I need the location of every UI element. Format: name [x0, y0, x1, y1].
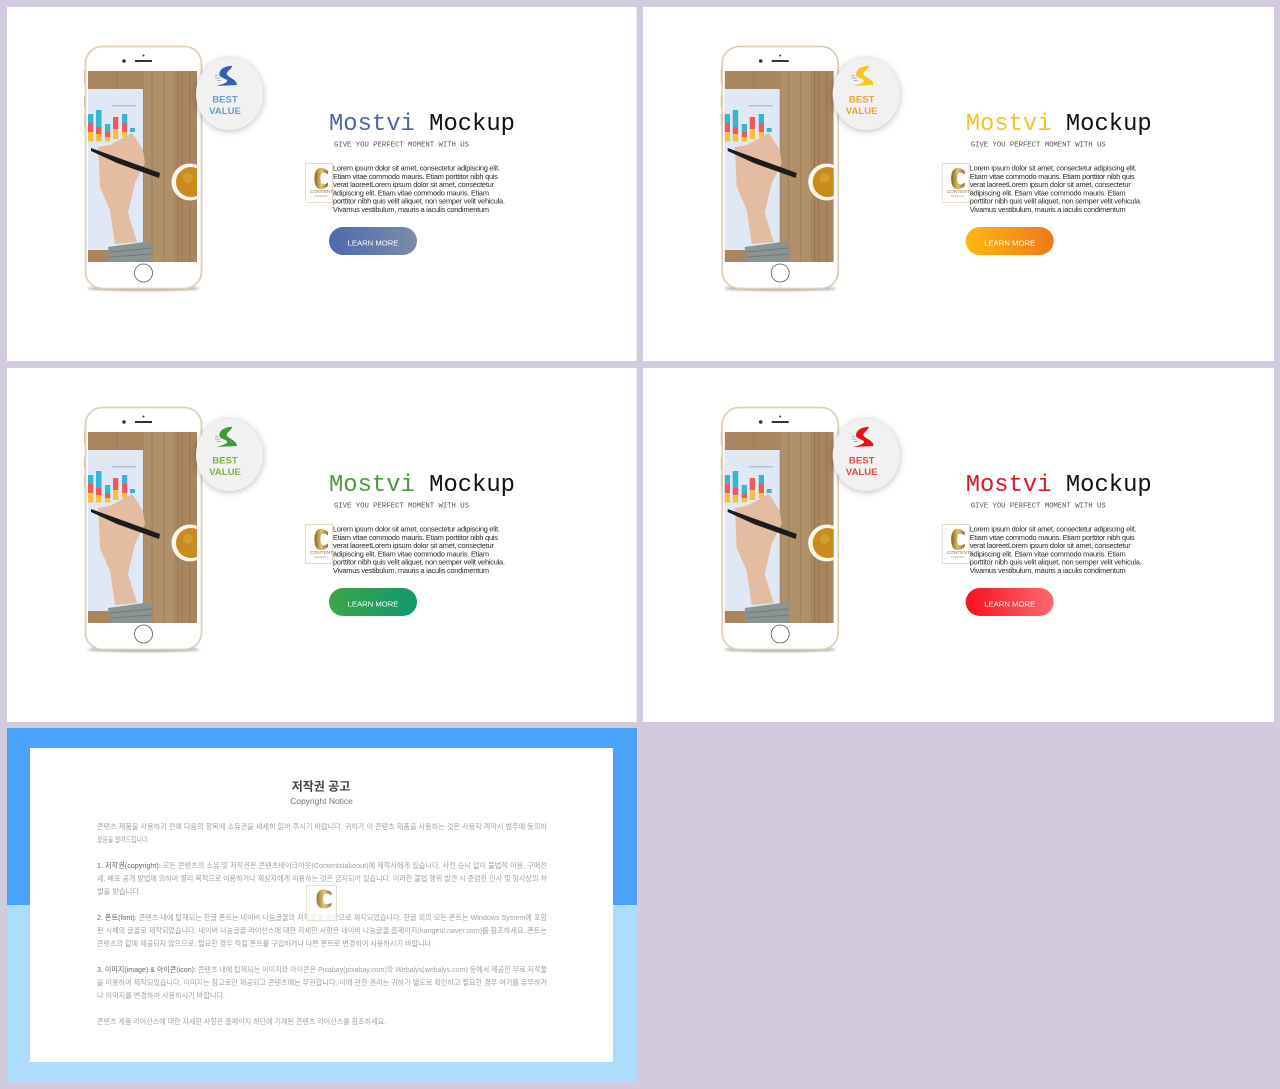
logo watermark: CONTENTS [310, 189, 336, 195]
title: Mostvi Mockup [329, 472, 515, 499]
badge: best value green: VALUE [209, 467, 241, 478]
button: learn more: LEARN MORE [348, 238, 398, 248]
body text: Lorem ipsum dolor sit amet, consectetur adipiscing elit. [970, 164, 1137, 172]
body text: Etiam vitae commodo mauris. Etiam porttitor nibh quis [970, 172, 1135, 181]
button: learn more: LEARN MORE [348, 600, 398, 608]
badge: best value yellow [833, 58, 900, 130]
notice subheading: Copyright Notice [290, 796, 353, 806]
body text: Vivamus vestibulum, mauris a iaculis condimentum [333, 205, 489, 214]
body text: Etiam vitae commodo mauris. Etiam porttitor nibh quis [333, 172, 498, 181]
body text [333, 524, 505, 575]
title: Mostvi Mockup [966, 111, 1152, 138]
badge: best value blue: VALUE [209, 106, 241, 117]
body text: Lorem ipsum dolor sit amet, consectetur adipiscing elit. [333, 164, 500, 172]
body text: Etiam vitae commodo mauris. Etiam porttitor nibh quis [333, 533, 498, 542]
body text: adipiscing elit. Etiam vitae commodo mauris. Etiam [970, 549, 1126, 558]
body text: Lorem ipsum dolor sit amet, consectetur adipiscing elit. [333, 524, 500, 534]
logo watermark [306, 524, 336, 564]
logo watermark: TAKEOUT [951, 194, 965, 198]
title: Mostvi Mockup [329, 111, 515, 138]
notice body text: 콘텐츠 제품 라이선스에 대한 자세한 사항은 홈페이지 하단에 기재된 콘텐츠 라이선스를 참조하세요. [97, 1016, 386, 1026]
notice body text: 2. 폰트(font): 콘텐츠 내에 탑재되는 한글 폰트는 네이버 나눔글꼴의 저작물을 바탕으로 제작되었습니다. 한글 외의 모든 폰트는 Windows System에 포함 [97, 912, 547, 922]
logo watermark: TAKEOUT [314, 555, 328, 559]
notice body text: 세, 배포 공개 방법에 의하여 영리 목적으로 이용하거나 제삼자에게 이용하는 것은 금지되어 있습니다. 이러한 불법 행위 발견 시 준엄한 민사 및 형사상의 처 [97, 873, 547, 883]
tagline: GIVE YOU PERFECT MOMENT WITH US [334, 502, 470, 510]
logo watermark [942, 164, 973, 202]
title: Mostvi Mockup [966, 472, 1152, 499]
logo watermark [307, 885, 336, 921]
notice body text [97, 821, 547, 1026]
badge: best value yellow: BEST [849, 94, 875, 106]
phone mockup with photo [84, 46, 208, 290]
badge: best value green [196, 419, 263, 491]
tagline: GIVE YOU PERFECT MOMENT WITH US [334, 142, 470, 150]
panel: yellow mockup [643, 7, 1274, 361]
body text: adipiscing elit. Etiam vitae commodo mauris. Etiam [970, 188, 1126, 197]
badge: best value red: VALUE [846, 467, 878, 478]
button: learn more [329, 227, 417, 255]
panel: copyright notice [7, 728, 637, 1082]
badge: best value red [833, 419, 900, 491]
panel: green mockup [7, 368, 636, 722]
notice body text: 을 이용하여 제작되었습니다. 이미지는 참고로만 제공되고 콘텐츠에는 무관합니다. 이에 관한 권리는 귀하가 별도로 확인하고 필요한 경우 여기를 유무하거 [97, 977, 547, 987]
badge: best value blue: BEST [212, 94, 238, 106]
phone mockup with photo [721, 46, 845, 290]
logo watermark: TAKEOUT [314, 194, 328, 198]
body text [970, 164, 1142, 214]
badge: best value yellow: VALUE [846, 106, 878, 117]
body text: verat laoreetLorem ipsum dolor sit amet, consectetur [333, 541, 495, 550]
phone mockup with photo [84, 408, 208, 652]
button: learn more [329, 588, 417, 616]
notice body text: 벌을 받습니다. [97, 886, 141, 896]
body text: Lorem ipsum dolor sit amet, consectetur adipiscing elit. [970, 524, 1137, 534]
body text: verat laoreetLorem ipsum dolor sit amet, consectetur [970, 541, 1131, 550]
body text: adipiscing elit. Etiam vitae commodo mauris. Etiam [333, 549, 489, 558]
notice body text: 셨음을 알려드립니다. [97, 834, 149, 844]
body text: Etiam vitae commodo mauris. Etiam porttitor nibh quis [970, 533, 1135, 542]
panel: red mockup [643, 368, 1274, 722]
notice body text: 1. 저작권(copyright): 모든 콘텐츠의 소유 및 저작권은 콘텐츠테이크아웃(Contentstakeout)에 제작사에게 있습니다. 사전 승낙 없이 불법적 이용, 구매전 [97, 860, 547, 870]
logo watermark: CONTENTS [947, 189, 973, 195]
body text: Vivamus vestibulum, mauris a iaculis condimentum [333, 566, 489, 575]
button: learn more [966, 227, 1054, 255]
notice body text: 된 시체의 글꼴로 제작되었습니다. 네이버 나눔글꼴 라이선스에 대한 자세한 사항은 네이버 나눔글꼴 홈페이지(hangeul.naver.com)를 참조하세요. 폰트는 [97, 925, 547, 935]
body text: Vivamus vestibulum, mauris a iaculis condimentum [970, 566, 1126, 575]
body text: Vivamus vestibulum, mauris a iaculis condimentum [970, 205, 1126, 214]
logo watermark: CONTENTS [310, 550, 336, 556]
body text [333, 164, 505, 214]
body text [970, 524, 1142, 575]
button: learn more: LEARN MORE [984, 600, 1035, 608]
body text: porttitor nibh quis velit aliquet, non semper velit vehicula. [333, 197, 505, 206]
logo watermark [942, 524, 973, 564]
button: learn more: LEARN MORE [984, 238, 1035, 248]
body text: porttitor nibh quis velit aliquet, non semper velit vehicula. [970, 558, 1142, 567]
logo watermark: TAKEOUT [951, 555, 965, 559]
button: learn more [966, 588, 1054, 616]
body text: verat laoreetLorem ipsum dolor sit amet, consectetur [970, 180, 1131, 189]
logo watermark: CONTENTS [947, 550, 973, 556]
notice body text: 나 이미지를 변경하여 사용하시기 바랍니다. [97, 990, 225, 1000]
notice body text: 3. 이미지(image) & 아이콘(icon): 콘텐츠 내에 탑재되는 이미지와 아이콘은 Pixabay(pixabay.com)와 Webalys(webalys.com) 등에서 제공한 무료 저작물 [97, 964, 547, 974]
logo watermark [306, 164, 336, 202]
tagline: GIVE YOU PERFECT MOMENT WITH US [971, 142, 1106, 150]
panel: blue mockup [7, 7, 636, 361]
body text: adipiscing elit. Etiam vitae commodo mauris. Etiam [333, 188, 489, 197]
body text: porttitor nibh quis velit aliquet, non semper velit vehicula. [970, 197, 1142, 206]
notice body text: 콘텐츠 제품을 사용하기 전에 다음의 항목에 소유권을 세세히 읽어 주시기 바랍니다. 귀하가 이 콘텐츠 제품을 사용하는 것은 사용자 계약서 범주에 동의하 [97, 821, 547, 831]
body text: verat laoreetLorem ipsum dolor sit amet, consectetur [333, 180, 495, 189]
badge: best value blue [196, 58, 263, 130]
notice heading: 저작권 공고 [292, 778, 350, 794]
phone mockup with photo [721, 408, 845, 652]
notice body text: 콘텐츠의 값에 제공되지 않으므로, 필요한 경우 적절 폰트를 구입하거나 다른 폰트로 변경하여 사용하시기 바랍니다. [97, 938, 433, 948]
badge: best value green: BEST [212, 456, 238, 466]
tagline: GIVE YOU PERFECT MOMENT WITH US [971, 502, 1106, 510]
body text: porttitor nibh quis velit aliquet, non semper velit vehicula. [333, 558, 505, 567]
badge: best value red: BEST [849, 456, 875, 466]
